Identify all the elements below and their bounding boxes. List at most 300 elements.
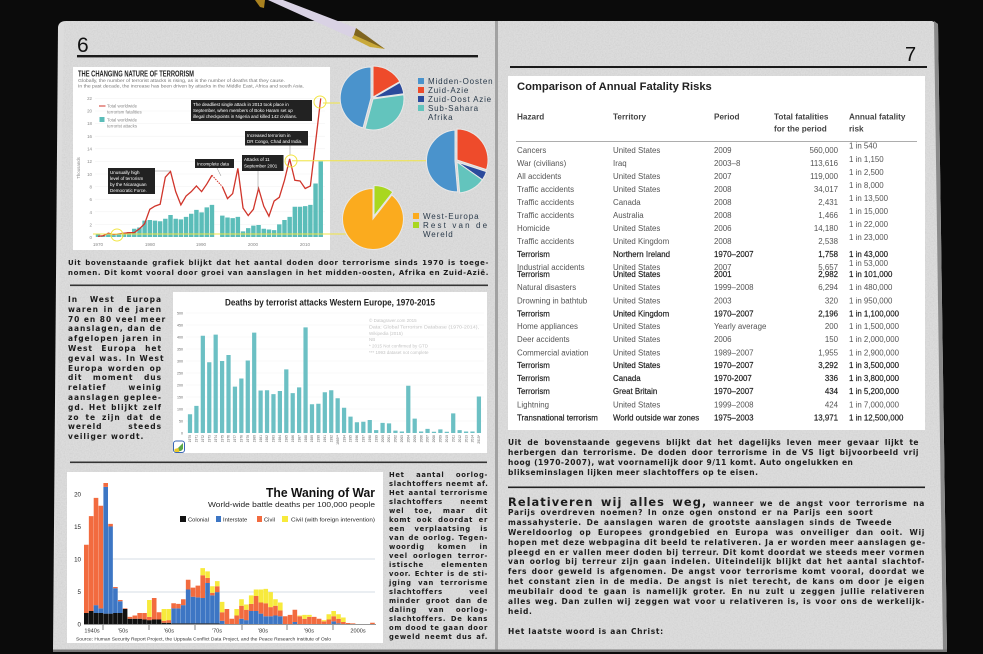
legend: regions: Zuid-Oost Azie: [428, 95, 492, 104]
y axis: 6: [90, 197, 93, 202]
chart subtitle: Globally, the number of terrorist attacks is rising, as is the number of deaths that they cause.: [78, 78, 285, 83]
table rows: everyday hazards: 1 in 7,000,000: [849, 400, 900, 410]
legend: europe: Wereld: [423, 230, 454, 239]
panel: waning of war chart: '50s: [118, 628, 128, 634]
text: war victims paragraph: slachtoffers neemt: [389, 498, 488, 506]
year labels: 1986: [291, 435, 295, 442]
year labels: 2007: [426, 435, 430, 442]
table rows: terrorism: 1970–2007: [714, 250, 754, 259]
callout: nicaraguan: Unusually high: [110, 170, 140, 175]
table rows: everyday hazards: Commercial aviation: [517, 348, 588, 358]
year labels: 1976: [227, 435, 231, 442]
x axis labels: 2000: [248, 242, 259, 247]
text: caption under table: blikseminslagen lijken meer slachtoffers op te eisen.: [508, 468, 758, 477]
callout: increased terrorism: DR Congo, Chad and India.: [247, 139, 302, 144]
year labels: 2014: [471, 435, 475, 442]
panel: waning of war chart: '70s: [212, 628, 222, 634]
table rows: terrorism: United States: [613, 361, 660, 370]
legend: regions: [418, 77, 493, 122]
pie: west europe vs rest of world: [342, 186, 403, 249]
table rows: everyday hazards: 1,955: [818, 348, 839, 358]
y axis: 2: [90, 222, 93, 228]
text: war victims paragraph: een verplaatsing is: [389, 525, 488, 533]
table rows: terrorism: Canada: [613, 374, 641, 383]
year labels: 1973: [208, 435, 212, 442]
chart subtitle: World-wide battle deaths per 100,000 people: [208, 500, 375, 509]
stacked bars: [84, 483, 375, 624]
source note: * 2015 Not confirmed by GTD: [369, 344, 429, 348]
yellow connectors to pie charts: [93, 96, 428, 241]
text: west europe paragraph: zo te zijn dat de: [68, 413, 162, 422]
text: west europe paragraph: afgelopen jaren in: [68, 334, 162, 343]
text: war victims paragraph: voor. Echter is de sti-: [389, 570, 488, 578]
y axis: 100: [177, 408, 183, 412]
table rows: everyday hazards: 2008: [714, 185, 732, 194]
table rows: everyday hazards: 2008: [714, 211, 732, 220]
callout: incomplete data: [195, 159, 234, 168]
table header: Annual fatality: [849, 112, 906, 122]
y axis: 8: [90, 184, 93, 190]
table rows: everyday hazards: 14,180: [814, 224, 839, 233]
chart legend: Total worldwide: [107, 118, 138, 122]
table rows: terrorism: 1 in 101,000: [849, 270, 893, 279]
text: war victims paragraph: veel oorlogen terror-: [389, 552, 488, 560]
text: relativeren paragraph: Het laatste woord is aan Christ:: [508, 627, 664, 636]
table rows: everyday hazards: 1 in 2,500: [849, 168, 884, 177]
year labels: 1989: [310, 435, 314, 442]
table rows: everyday hazards: All accidents: [517, 172, 561, 181]
year labels: 2013: [464, 435, 468, 442]
table rows: everyday hazards: United States: [613, 296, 660, 306]
year labels: 1995: [349, 435, 353, 442]
table rows: everyday hazards: Home appliances: [517, 322, 578, 331]
text: relativeren paragraph: pleegd en er vallen meer doden bij terreur. Dit komt doordat we steeds meer vormen: [508, 548, 925, 557]
text: war victims paragraph: Het aantal terrorisme: [389, 489, 488, 497]
year labels: 2011: [451, 435, 455, 442]
text: west europe paragraph: aanslagen, dan de: [68, 324, 162, 333]
y axis: 5: [78, 589, 82, 596]
y axis: 22: [87, 96, 93, 101]
pen: [255, 0, 385, 49]
panel: waning of war chart: '60s: [164, 628, 174, 634]
y axis: 0: [181, 432, 183, 436]
callout: incomplete data: Incomplete data: [197, 161, 230, 166]
table rows: everyday hazards: United States: [613, 263, 660, 272]
chart subtitle: In the past decade, the increase has been driven by attacks in the Middle East, Africa and south Asia.: [78, 84, 304, 88]
callout: 11 september: Attacks of 11: [244, 157, 270, 162]
text: west europe paragraph: In West Europa: [68, 295, 162, 304]
table rows: everyday hazards: Cancers: [517, 146, 546, 155]
year labels: 1991: [323, 435, 327, 442]
page number 6: 6: [77, 34, 89, 57]
rule below western europe section: [70, 462, 487, 463]
year labels: 1992: [329, 435, 333, 442]
y axis: [177, 312, 183, 436]
table header: risk: [849, 124, 864, 134]
table rows: everyday hazards: United States: [613, 322, 660, 331]
table rows: everyday hazards: Traffic accidents: [517, 237, 574, 246]
text: relativeren paragraph: fers door geweld is afgenomen. De angst voor terrorisme komt vooral, doordat we: [508, 567, 925, 576]
text: relativeren paragraph: massahysterie. De aanslagen waren de grootste aanslagen sinds de Tweede: [508, 518, 892, 527]
table rows: terrorism: 1 in 12,500,000: [849, 414, 904, 422]
table rows: terrorism: 1 in 1,100,000: [849, 310, 900, 318]
text: west europe paragraph: West Europa het: [68, 344, 162, 353]
text: war victims paragraph: slachtoffers neemt af.: [389, 480, 489, 488]
heading: relativeren wij alles weg: Relativeren wij alles weg, wanneer we de angst voor terrorisme na: [508, 495, 925, 509]
callout: deadliest attack: The deadliest single attack in 2013 took place in: [193, 102, 289, 107]
text: war victims paragraph: Het aantal oorlog-: [389, 471, 488, 479]
callout: nicaraguan: [108, 168, 155, 194]
year labels: 2004: [406, 435, 410, 442]
year labels: 2001: [387, 435, 391, 442]
source note: [369, 317, 479, 355]
table rows: everyday hazards: 2003–8: [714, 159, 741, 168]
table rows: terrorism: Great Britain: [613, 387, 657, 396]
text: relativeren paragraph: [508, 495, 926, 636]
table header: Territory: [613, 112, 647, 122]
table rows: everyday hazards: United States: [613, 185, 660, 194]
panel: changing nature of terrorism chart: [73, 67, 330, 250]
table rows: everyday hazards: Lightning: [517, 400, 549, 410]
y axis: 10: [74, 556, 82, 564]
table title: Comparison of Annual Fatality Risks: [517, 81, 712, 93]
callout: deadliest attack: illegal checkpoints in Nigeria and killed 142 civilians.: [193, 114, 297, 119]
text: west europe paragraph: veiliger wordt.: [68, 432, 144, 441]
year labels: 1977: [233, 435, 237, 442]
table rows: everyday hazards: Canada: [613, 198, 641, 207]
table header: Hazard: [517, 112, 544, 122]
text: war victims paragraph: komt ook doordat er: [389, 516, 488, 524]
table rows: everyday hazards: United States: [613, 335, 660, 344]
table rows: everyday hazards: 113,616: [810, 159, 839, 168]
table rows: everyday hazards: 2,431: [818, 198, 838, 207]
text: war victims paragraph: slachtoffers. De kans: [389, 615, 488, 623]
panel: western europe bar chart: [173, 292, 487, 453]
table rows: everyday hazards: 1999–2008: [714, 400, 754, 410]
text: caption under pie charts: nomen. Dit komt vooral door groei van aanslagen in het midden-oosten, Afrika en Zuid-Azië.: [68, 269, 489, 277]
x axis labels: 2010: [300, 242, 311, 247]
callout leader lines: [155, 145, 290, 190]
text: west europe paragraph: relatief weinig: [68, 383, 162, 392]
text: relativeren paragraph: van oorlog bij terreur zijn gaan indelen. Uiteindelijk blijkt dat het aantal slachtof-: [508, 557, 925, 566]
source note: NB: [369, 337, 375, 342]
text: west europe paragraph: wereld steeds: [68, 422, 162, 431]
civil with foreign intervention bars: [147, 568, 346, 622]
text: west europe paragraph: waren in de jaren: [68, 305, 162, 314]
y axis: 14: [87, 146, 93, 152]
table rows: everyday hazards: 1,466: [818, 211, 839, 220]
table rows: everyday hazards: 2008: [714, 198, 732, 207]
table rows: everyday hazards: 1 in 22,000: [849, 220, 889, 229]
table header: Period: [714, 112, 739, 122]
chart legend: Total worldwide: [107, 104, 138, 108]
table rows: terrorism: 2001: [714, 270, 732, 279]
table rows: everyday hazards: 424: [825, 400, 839, 410]
table rows: everyday hazards: War (civilians): [517, 159, 567, 168]
table rows: terrorism: 336: [825, 374, 839, 383]
year labels: 1974: [214, 435, 218, 442]
year labels: 1982: [265, 435, 269, 442]
table rows: everyday hazards: 150: [825, 335, 839, 344]
table rows: everyday hazards: Industrial accidents: [517, 263, 585, 272]
table rows: everyday hazards: 1 in 540: [849, 142, 878, 150]
text: caption under table: hoog (1970-2007), wat voornamelijk door 9/11 komt. Auto ongelukken en: [508, 458, 853, 467]
y axis: 16: [87, 134, 93, 139]
text: relativeren paragraph: meubilair dood te gaan is namelijk groter. En nu zult u zeggen jullie relativeren: [508, 587, 925, 596]
text: west europe paragraph: gd. Het blijkt zelf: [68, 403, 162, 412]
year labels: 1975: [220, 435, 224, 442]
table rows: everyday hazards: 2006: [714, 335, 732, 344]
x axis labels: 1980: [145, 242, 156, 247]
x axis labels: 1970: [93, 242, 104, 247]
table rows: everyday hazards: 2,538: [818, 237, 839, 246]
chart legend: Civil (with foreign intervention): [291, 518, 375, 524]
panel: waning of war chart: '90s: [304, 628, 314, 634]
rule above relativeren text: [508, 486, 925, 488]
chart legend: [180, 516, 375, 524]
text: west europe paragraph: geval was. In West: [68, 354, 164, 363]
page number 7: 7: [905, 44, 916, 66]
table rows: everyday hazards: 200: [825, 322, 839, 331]
y axis: [76, 96, 93, 240]
table rows: everyday hazards: United States: [613, 146, 660, 155]
y axis: 12: [87, 159, 93, 164]
table rows: everyday hazards: 1999–2008: [714, 283, 754, 292]
panel: waning of war chart: '80s: [258, 628, 268, 634]
table rows: everyday hazards: Traffic accidents: [517, 198, 574, 207]
text: relativeren paragraph: het constant zien in de media. De angst is niet terecht, de kans om door je eigen: [508, 577, 925, 586]
table rows: everyday hazards: 34,017: [814, 185, 838, 194]
table rows: everyday hazards: 1 in 950,000: [849, 296, 893, 306]
chart title: The Waning of War: [266, 485, 375, 500]
year labels: 1988: [304, 435, 308, 442]
text: caption under pie charts: [68, 259, 489, 277]
chart legend: Interstate: [223, 518, 247, 524]
table rows: everyday hazards: 2003: [714, 296, 732, 306]
year labels: 1981: [259, 435, 263, 442]
year labels: 1972: [201, 435, 205, 442]
panel: waning of war chart: 2000s: [350, 628, 366, 634]
table header: Total fatalities: [774, 112, 829, 122]
table rows: everyday hazards: Yearly average: [714, 322, 767, 331]
text: west europe paragraph: Europa worden op: [68, 364, 162, 373]
year labels: 2010: [445, 435, 449, 442]
y axis: 15: [74, 524, 82, 531]
table rows: everyday hazards: Drowning in bathtub: [517, 296, 588, 306]
table rows: everyday hazards: United States: [613, 283, 660, 292]
table rows: terrorism: 1975–2003: [714, 414, 754, 422]
y axis: 0: [90, 235, 93, 240]
table rows: everyday hazards: 2008: [714, 237, 732, 246]
text: war victims paragraph: [388, 471, 489, 641]
table rows: everyday hazards: 1 in 1,150: [849, 155, 884, 164]
text: caption under table: [508, 438, 919, 477]
chart legend: Colonial: [188, 518, 209, 524]
pie: 2007 deaths by region: [426, 129, 488, 193]
legend: europe: [413, 212, 488, 239]
chart subtitle: [78, 78, 304, 88]
chart title: THE CHANGING NATURE OF TERRORISM: [78, 70, 194, 78]
table rows: terrorism: 1970-2007: [714, 374, 752, 383]
y axis: 350: [177, 348, 183, 352]
callout: nicaraguan: by the Nicaraguan: [110, 182, 147, 187]
table rows: everyday hazards: Natural disasters: [517, 283, 576, 292]
table rows: terrorism: 1970–2007: [714, 387, 754, 396]
y axis: 250: [177, 372, 183, 376]
year labels: 2012: [458, 435, 462, 442]
table rows: everyday hazards: 2009: [714, 146, 732, 155]
legend: regions: Midden-Oosten: [428, 77, 493, 86]
table rows: everyday hazards: Homicide: [517, 224, 550, 233]
callout: nicaraguan: level of terrorism: [110, 176, 144, 181]
text: war victims paragraph: wel toe, maar dit: [389, 507, 488, 515]
table rows: everyday hazards: United States: [613, 400, 660, 410]
chart title: Deaths by terrorist attacks Western Europe, 1970-2015: [225, 298, 436, 308]
year labels: 1997: [362, 435, 366, 442]
callout: deadliest attack: [191, 100, 312, 121]
table rows: everyday hazards: United States: [613, 224, 660, 233]
text: relativeren paragraph: Wereldoorlog op Europees grondgebied en Europa was onveiliger dan ooit. Wij: [508, 528, 925, 537]
text: war victims paragraph: minder groot dan de: [389, 597, 488, 605]
y axis: 400: [177, 336, 183, 340]
table rows: everyday hazards: Traffic accidents: [517, 185, 574, 194]
year labels: 2003: [400, 435, 404, 442]
year labels: 2008: [432, 435, 436, 442]
y axis: 150: [177, 396, 183, 400]
legend: regions: Sub-Sahara: [428, 104, 479, 113]
civil bars: [84, 483, 375, 624]
text: war victims paragraph: van de oorlog. Tegen-: [389, 534, 488, 542]
source note: Data: Global Terrorism Database (1970-2014),: [369, 324, 479, 330]
table rows: everyday hazards: United States: [613, 348, 660, 358]
y axis: 200: [177, 384, 183, 388]
panel: fatality risk table: [508, 76, 925, 430]
table rows: terrorism: 2,196: [818, 310, 839, 318]
year labels: 1984: [278, 435, 282, 442]
y axis: 0: [78, 622, 82, 628]
x axis labels: [93, 242, 311, 247]
text: west europe paragraph: dit moment dus: [68, 373, 162, 382]
legend: europe: West-Europa: [423, 212, 479, 221]
y axis: 500: [177, 312, 183, 316]
table header: for the period: [774, 124, 827, 134]
rule below pie section: [70, 284, 488, 286]
table rows: everyday hazards: [517, 142, 900, 410]
y axis: 50: [179, 420, 183, 424]
table rows: terrorism: 1970–2007: [714, 310, 754, 318]
colonial bars: [84, 609, 220, 624]
table rows: terrorism: Terrorism: [517, 270, 550, 279]
year labels: 2005: [413, 435, 417, 442]
x axis labels: 1990: [196, 242, 207, 247]
table rows: terrorism: 1 in 3,500,000: [849, 361, 900, 370]
table rows: terrorism: 434: [825, 387, 839, 396]
table rows: terrorism: Terrorism: [517, 250, 550, 259]
source note: © Datagraver.com 2015: [369, 317, 417, 323]
text: west europe paragraph: [68, 295, 166, 441]
table rows: everyday hazards: Deer accidents: [517, 335, 570, 344]
bars: [188, 327, 481, 433]
year labels: 1979: [246, 435, 250, 442]
legend: regions: Afrika: [428, 113, 453, 122]
table rows: everyday hazards: Iraq: [613, 159, 627, 168]
table rows: terrorism: 2,982: [818, 270, 838, 279]
chart legend: terrorism fatalities: [107, 110, 142, 114]
text: war victims paragraph: geweld neemt dus af.: [389, 633, 488, 641]
table rows: everyday hazards: 1989–2007: [714, 348, 754, 358]
table rows: terrorism: [517, 250, 904, 422]
table rows: terrorism: United Kingdom: [613, 310, 670, 318]
source note: *** 1993 dataset not complete: [369, 350, 429, 355]
top rule right: [510, 66, 927, 68]
pie: 2013 deaths by region: [340, 66, 404, 130]
text: relativeren paragraph: alles weg. Dan zullen wij zeggen wat voor u relativeren is, is voor ons de werkelijk-: [508, 597, 925, 606]
legend: europe: Rest van de: [423, 221, 488, 230]
legend: regions: Zuid-Azie: [428, 86, 469, 95]
text: war victims paragraph: slachtoffers veel: [389, 588, 488, 596]
text: west europe paragraph: aanslagen geplee-: [68, 393, 162, 402]
year labels: 1990: [317, 435, 321, 442]
year labels: 2015*: [477, 434, 481, 444]
table rows: everyday hazards: 1 in 15,000: [849, 207, 889, 216]
callout: increased terrorism: [245, 131, 308, 146]
year labels: 1993**: [336, 434, 340, 445]
table rows: terrorism: World outside war zones: [613, 414, 699, 422]
callout: increased terrorism: Increased terrorism in: [247, 133, 291, 138]
table rows: everyday hazards: 560,000: [809, 146, 839, 155]
table rows: everyday hazards: United States: [613, 172, 660, 181]
year labels: 1983: [272, 435, 276, 442]
table rows: terrorism: Northern Ireland: [613, 250, 670, 259]
text: west europe paragraph: 70 en 80 veel meer: [68, 315, 166, 324]
year labels: 1994: [342, 435, 346, 442]
table header: [517, 112, 906, 134]
table rows: everyday hazards: United Kingdom: [613, 237, 670, 246]
year labels: 1971: [195, 435, 199, 442]
y axis: 10: [87, 172, 93, 177]
y axis: 300: [177, 360, 183, 364]
year labels: 1978: [240, 435, 244, 442]
table rows: everyday hazards: 1 in 23,000: [849, 233, 889, 242]
year labels: 2009: [439, 435, 443, 442]
panel: waning of war chart: [67, 472, 383, 643]
year labels: 1970: [188, 435, 192, 442]
chart legend: [99, 104, 142, 128]
table rows: everyday hazards: 2007: [714, 172, 732, 181]
text: relativeren paragraph: hopen met deze webpagina dit beeld te relativeren. Ja er worden meer aanslagen ge-: [508, 538, 926, 547]
text: war victims paragraph: om dood te gaan door: [389, 624, 488, 632]
chart legend: Civil: [264, 518, 275, 524]
text: relativeren paragraph: Parijs overdreven noemen? In onze ogen onstond er na Parijs een soort: [508, 508, 873, 517]
table rows: terrorism: 1 in 5,200,000: [849, 387, 900, 396]
table rows: terrorism: Terrorism: [517, 387, 550, 396]
text: war victims paragraph: jging van terrorisme: [389, 579, 488, 587]
source: Source: Human Security Report Project, the Uppsala Conflict Data Project, and the Peace Research Institute of Oslo: [76, 636, 331, 642]
table rows: everyday hazards: 119,000: [810, 172, 839, 181]
table rows: everyday hazards: 2006: [714, 224, 732, 233]
y axis: Thousands: [76, 156, 81, 179]
interstate bars: [94, 487, 341, 624]
table rows: terrorism: Terrorism: [517, 361, 550, 370]
table rows: everyday hazards: 1 in 2,900,000: [849, 348, 900, 358]
table rows: everyday hazards: 5,657: [818, 263, 838, 272]
year labels: 2000: [381, 435, 385, 442]
year labels: 1996: [355, 435, 359, 442]
table rows: terrorism: 1 in 43,000: [849, 250, 889, 259]
table rows: terrorism: Transnational terrorism: [517, 414, 598, 422]
table rows: everyday hazards: 1 in 53,000: [849, 259, 889, 268]
callout: 11 september: [242, 155, 284, 171]
